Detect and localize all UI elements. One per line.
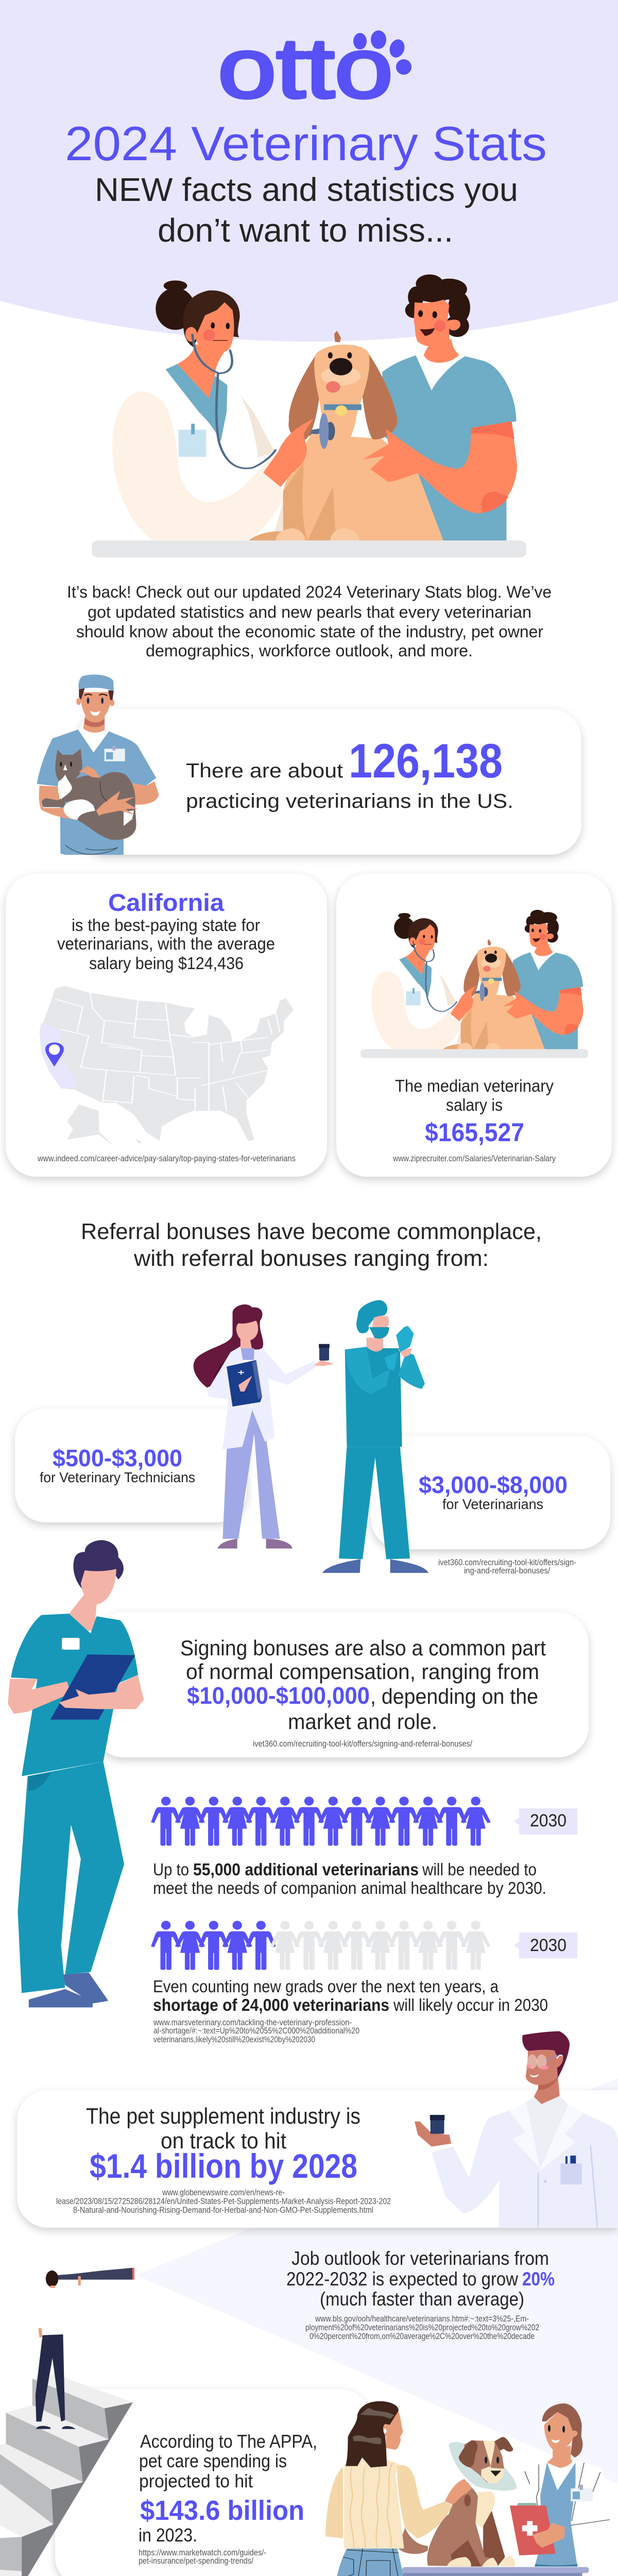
median text <box>395 1076 554 1114</box>
source: referral: ivet360.com/recruiting-tool-kit/offers/sign- <box>438 1557 576 1567</box>
stat text: practicing veterinarians in the US. <box>186 790 513 812</box>
label: in 2023: in 2023. <box>139 2524 197 2546</box>
source: referral: ing-and-referral-bonuses/ <box>464 1566 550 1575</box>
text: 55,000 additional veterinarians: will be needed to <box>422 1860 537 1879</box>
map: United States <box>40 986 294 1146</box>
illustration: surgeon with gloves <box>322 1300 428 1573</box>
panel: pet supplements <box>17 2090 618 2228</box>
source: www.indeed.com/career-advice/pay-salary/top-paying-states-for-veterinarians <box>37 1154 296 1163</box>
median text: The median veterinary <box>395 1076 554 1095</box>
telescope view beam <box>136 2078 618 2484</box>
source: referral <box>438 1557 576 1575</box>
stat text: 126,138 <box>349 734 503 788</box>
illustration: stairs <box>0 2374 133 2576</box>
year tag: 2030 <box>513 1808 577 1835</box>
salary text: is the best-paying state for <box>72 916 260 935</box>
source: https://www.marketwatch.com/guides/- <box>139 2548 266 2557</box>
illustration: vet holding cat <box>37 674 159 855</box>
spending text: According to The APPA, <box>140 2431 317 2452</box>
supplements text: The pet supplement industry is <box>86 2104 360 2129</box>
signing text <box>180 1636 546 1734</box>
header background <box>0 0 618 342</box>
stat: $1.4 billion by 2028: $1.4 billion by 2028 <box>90 2147 357 2185</box>
text: 55,000 additional veterinarians: meet the needs of companion animal healthcare by 2030. <box>153 1878 546 1897</box>
subtitle <box>95 171 518 249</box>
illustration: person with telescope <box>36 2268 134 2429</box>
signing text: Signing bonuses are also a common part <box>180 1636 546 1660</box>
intro text: got updated statistics and new pearls that every veterinarian <box>88 603 531 621</box>
text: shortage: will likely occur in 2030 <box>393 1995 548 2014</box>
illustration: technician with bottle <box>194 1304 334 1549</box>
intro text <box>67 583 552 660</box>
icon: location pin <box>45 1042 64 1066</box>
source: bls <box>305 2314 539 2341</box>
panel: California <box>6 874 327 1177</box>
heading: referral bonuses: with referral bonuses ranging from: <box>133 1246 489 1271</box>
median text: salary is <box>446 1095 503 1114</box>
panel: pet care spending <box>55 2389 371 2576</box>
salary text: salary being $124,436 <box>89 954 244 973</box>
illustration: owner with dog and vet <box>319 2401 618 2576</box>
source: 8-Natural-and-Nourishing-Rising-Demand-for-Herbal-and-Non-GMO-Pet-Supplements.html <box>73 2205 373 2215</box>
job outlook text: 2022-2032 is expected to grow <box>286 2268 518 2290</box>
subtitle: don’t want to miss... <box>158 212 453 249</box>
text: 55,000 additional veterinarians: Up to <box>153 1860 189 1879</box>
subtitle: NEW facts and statistics you <box>95 171 518 208</box>
signing text: of normal compensation, ranging from <box>186 1659 539 1684</box>
stat: $165,527: $165,527 <box>425 1118 524 1147</box>
source: mars veterinary: veterinarians,likely%20still%20exist%20by%202030 <box>153 2035 315 2044</box>
source: www.globenewswire.com/en/news-re- <box>162 2188 285 2197</box>
supplements text: on track to hit <box>161 2128 286 2154</box>
source <box>56 2188 391 2215</box>
panel: practicing veterinarians <box>77 709 581 855</box>
salary text <box>57 916 275 973</box>
panel: median salary <box>336 874 612 1177</box>
text: 55,000 additional veterinarians: 55,000 additional veterinarians <box>193 1860 419 1879</box>
heading: referral bonuses <box>81 1219 542 1271</box>
job outlook text <box>286 2248 555 2310</box>
panel: veterinarians bonus <box>371 1436 610 1549</box>
heading: California: California <box>108 889 225 916</box>
label: technicians: for Veterinary Technicians <box>40 1469 195 1485</box>
source: bls: 0%20percent%20from,on%20average%2C%20over%20the%20decade <box>310 2331 535 2341</box>
supplements text <box>86 2104 360 2154</box>
salary text: veterinarians, with the average <box>57 934 275 953</box>
heading: referral bonuses: Referral bonuses have become commonplace, <box>81 1219 542 1244</box>
chart: shortage of 24,000 veterinarians <box>151 1921 491 1970</box>
job outlook text: (much faster than average) <box>320 2289 524 2310</box>
year tag: 2030 <box>513 1933 577 1958</box>
panel: technicians bonus <box>15 1409 247 1522</box>
illustration: nurse with clipboard <box>8 1540 144 2007</box>
spending text: projected to hit <box>139 2470 253 2492</box>
label: veterinarians: for Veterinarians <box>442 1496 543 1512</box>
stat: technicians: $500-$3,000 <box>53 1445 182 1471</box>
stat text: There are about <box>186 760 343 782</box>
year tag: 2030: 2030 <box>530 1811 566 1831</box>
signing text: market and role. <box>288 1709 437 1734</box>
illustration: technician with bottle: + <box>237 1368 245 1377</box>
stat: $143.6 billion: $143.6 billion <box>140 2495 304 2526</box>
text: shortage <box>153 1977 548 2014</box>
source: mars veterinary: al-shortage/#:~:text=Up%20to%2055%2C000%20additional%20 <box>153 2026 359 2036</box>
illustration: vets with dog small <box>360 910 588 1058</box>
source: mars veterinary <box>153 2018 359 2044</box>
source: ivet360.com/recruiting-tool-kit/offers/signing-and-referral-bonuses/ <box>253 1739 472 1749</box>
source: bls: ployment%20of%20veterinarians%20is%20projected%20to%20grow%202 <box>305 2323 539 2332</box>
stat: veterinarians: $3,000-$8,000 <box>419 1471 568 1498</box>
title: 2024 Veterinary Stats <box>65 116 547 171</box>
job outlook text: 20% <box>522 2268 555 2290</box>
source: pet-insurance/pet-spending-trends/ <box>139 2556 253 2566</box>
intro text: It’s back! Check out our updated 2024 Veterinary Stats blog. We’ve <box>67 583 552 601</box>
source: mars veterinary: www.marsveterinary.com/tackling-the-veterinary-profession- <box>153 2018 352 2027</box>
spending text: pet care spending is <box>139 2450 287 2471</box>
logo: otto: otto <box>218 21 393 115</box>
illustration: vets with dog <box>92 275 526 557</box>
job outlook text: Job outlook for veterinarians from <box>291 2248 549 2269</box>
source: bls: www.bls.gov/ooh/healthcare/veterinarians.htm#:~:text=3%25-,Em- <box>315 2314 529 2324</box>
panel: signing bonuses <box>93 1612 589 1757</box>
signing text: , depending on the <box>370 1684 538 1708</box>
stat text <box>186 734 513 812</box>
text: shortage: shortage of 24,000 veterinarians <box>153 1995 389 2014</box>
text: shortage: Even counting new grads over the next ten years, a <box>153 1977 499 1996</box>
year tag: 2030: 2030 <box>530 1936 566 1955</box>
source <box>139 2548 266 2566</box>
intro text: should know about the economic state of the industry, pet owner <box>76 622 543 641</box>
spending text <box>139 2431 317 2492</box>
text: 55,000 additional veterinarians <box>153 1860 546 1897</box>
signing text: $10,000-$100,000 <box>187 1682 370 1709</box>
chart: 55,000 additional veterinarians <box>151 1797 491 1846</box>
intro text: demographics, workforce outlook, and more. <box>146 641 473 660</box>
source: lease/2023/08/15/2725286/28124/en/United-States-Pet-Supplements-Market-Analysis-Report-2023-202 <box>56 2196 391 2206</box>
illustration: pharmacist in lab coat <box>415 2031 618 2227</box>
source: www.ziprecruiter.com/Salaries/Veterinarian-Salary <box>392 1154 556 1163</box>
